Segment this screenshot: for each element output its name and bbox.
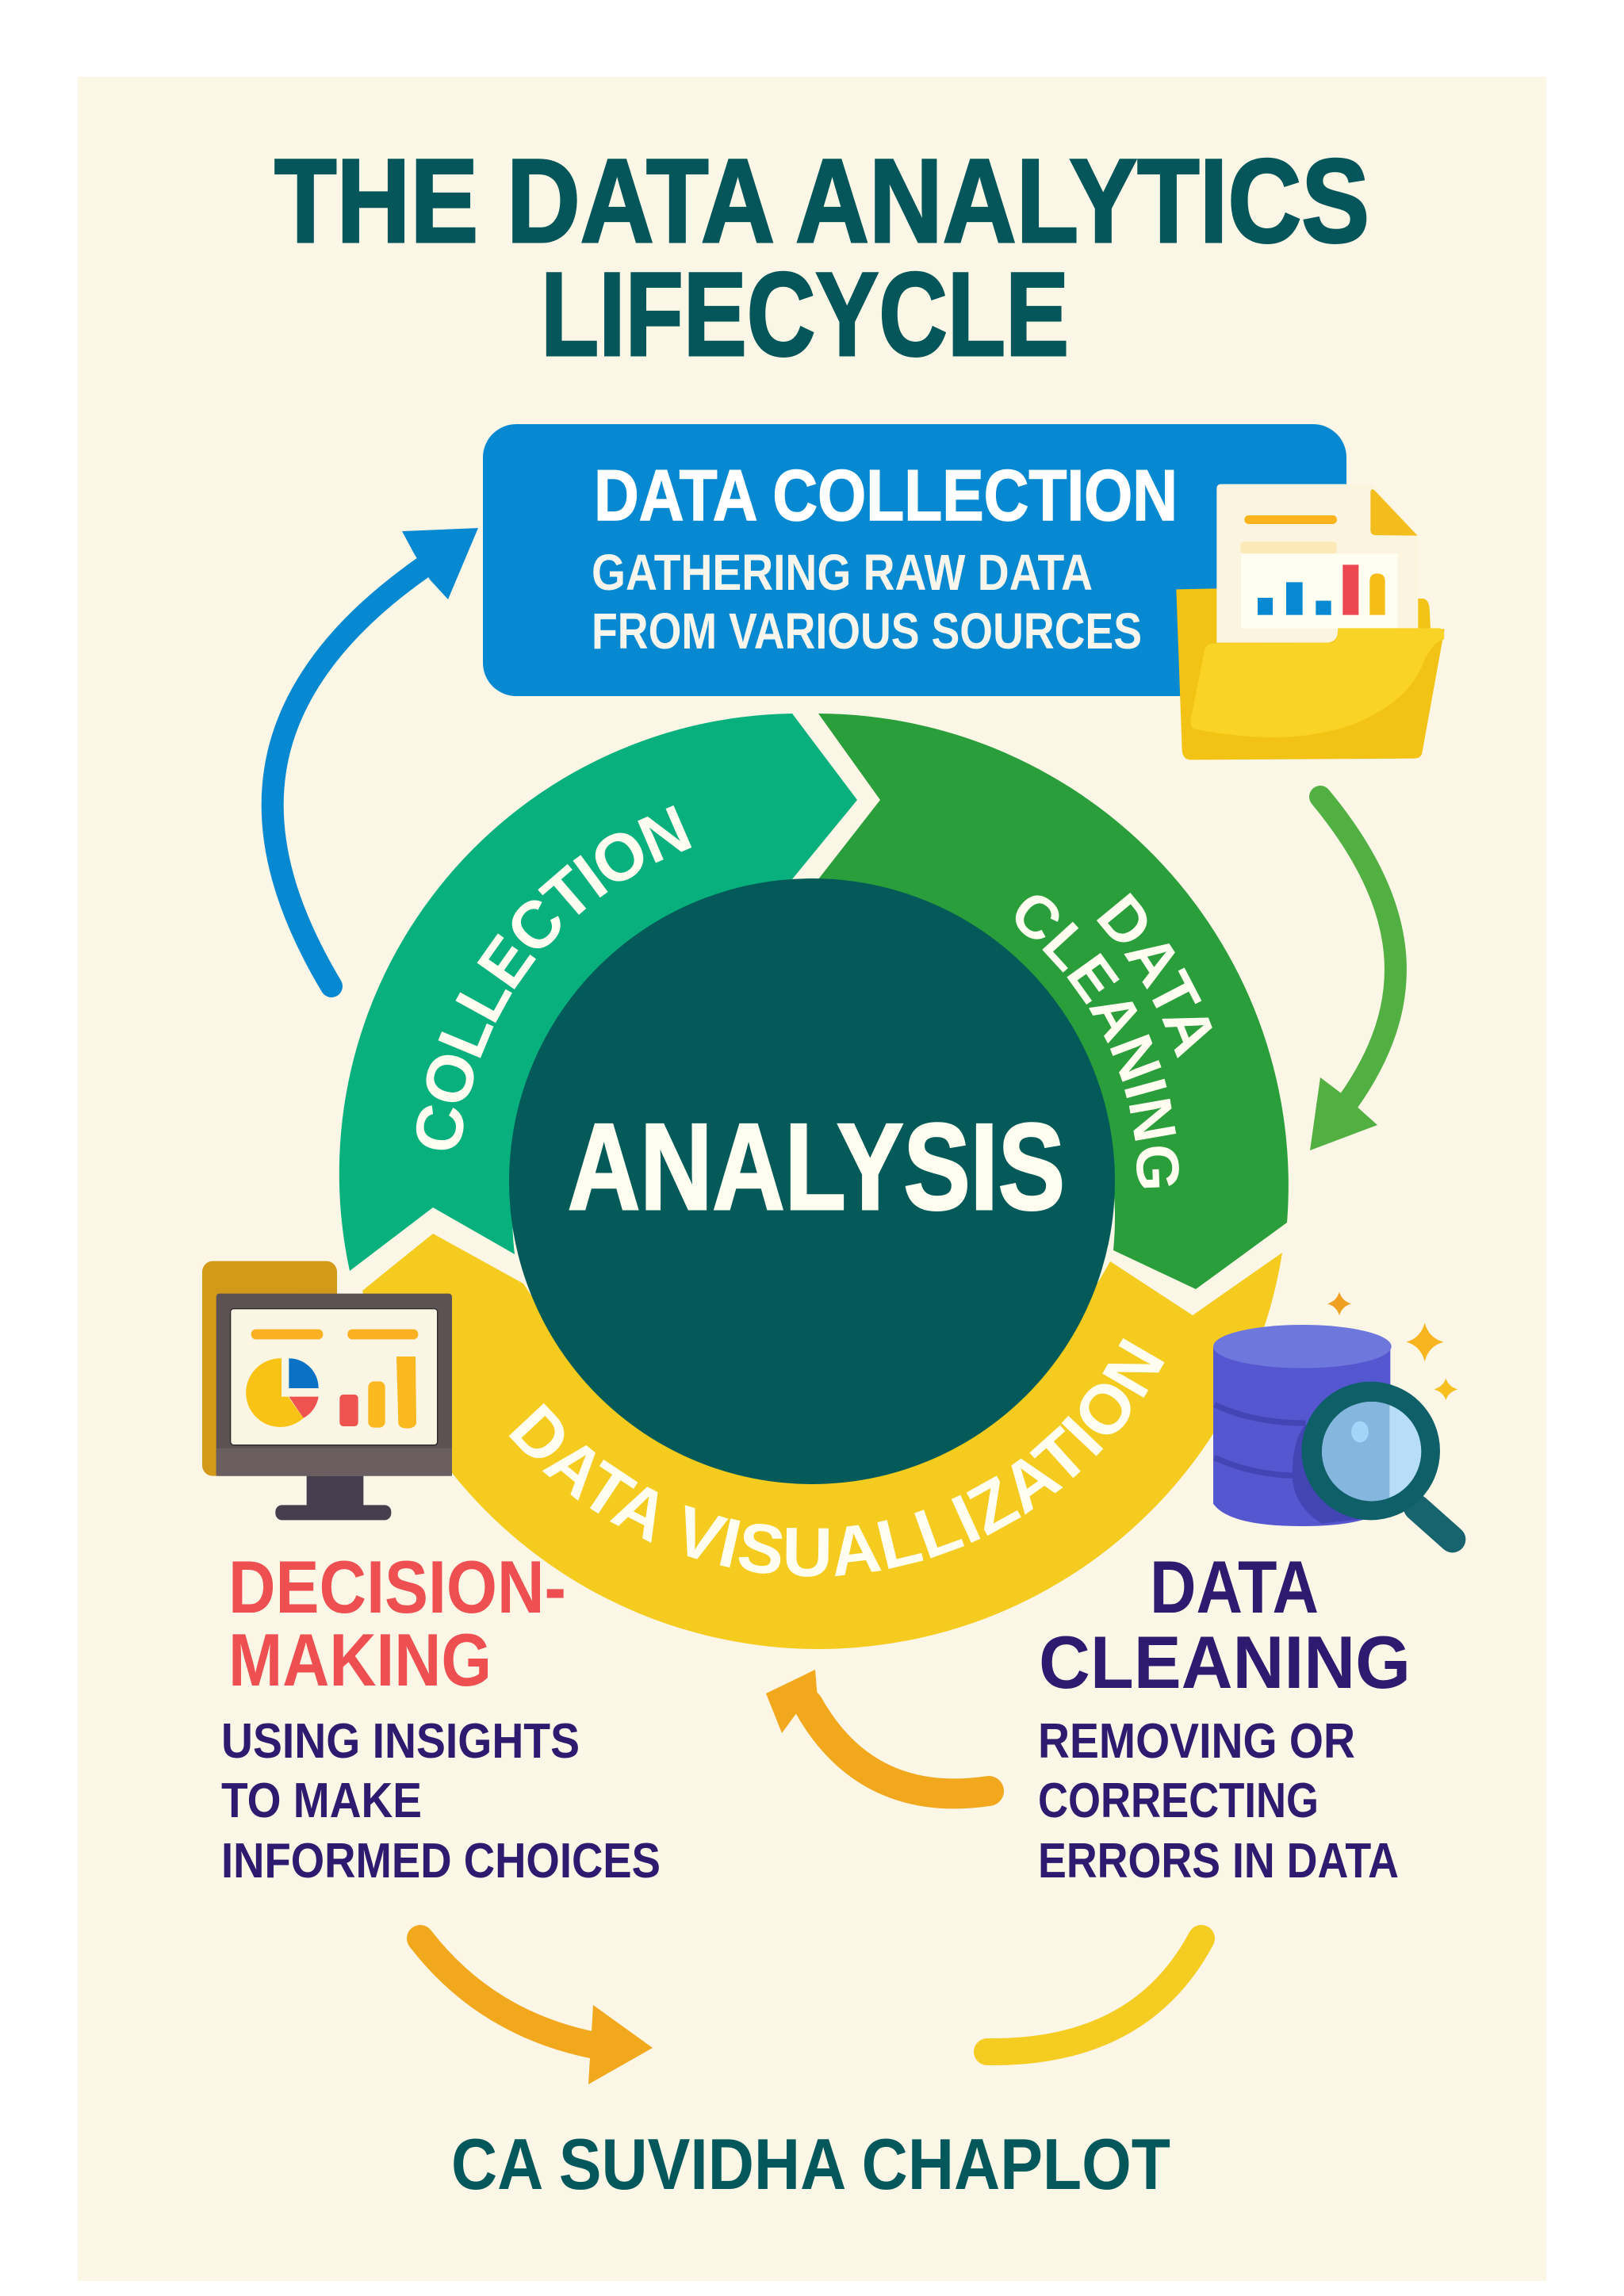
card description: GATHERING RAW DATA: [592, 544, 1093, 601]
card description: [592, 544, 1142, 660]
description: decision-making: TO MAKE: [221, 1774, 422, 1828]
panel: data collection card: [483, 424, 1346, 696]
heading: decision-making: [228, 1545, 566, 1701]
description: decision-making: [221, 1714, 661, 1888]
description: data cleaning: ERRORS IN DATA: [1038, 1834, 1399, 1888]
heading: decision-making: MAKING: [228, 1618, 492, 1701]
sparkles: [1327, 1292, 1457, 1400]
arrow: orange bottom left: [420, 1938, 653, 2084]
heading: decision-making: DECISION-: [228, 1545, 566, 1628]
arrow: orange small: [766, 1670, 989, 1793]
description: data cleaning: REMOVING OR: [1038, 1714, 1355, 1769]
centre circle: analysis: ANALYSIS: [568, 1098, 1065, 1235]
card heading: DATA COLLECTION: [594, 456, 1178, 536]
magnifier: [1301, 1382, 1453, 1540]
description: data cleaning: [1038, 1714, 1399, 1888]
icon: database with magnifier: [1213, 1292, 1457, 1540]
heading: data cleaning: DATA: [1150, 1545, 1319, 1628]
title: LIFECYCLE: [541, 247, 1069, 381]
ring segment: data visualization: DATA VISUALLIZATION: [509, 1338, 1164, 1577]
icon: monitor with dashboard: [202, 1261, 452, 1520]
arrow: blue: [273, 528, 478, 986]
ring segment: data visualization: [362, 1234, 1282, 1649]
ring segment: data cleaning: [818, 714, 1289, 1289]
ring segment: collection: COLLECTION: [416, 806, 691, 1150]
card background: [483, 424, 1346, 696]
ring segment: data cleaning: CLEANING: [1015, 895, 1179, 1188]
title: [274, 134, 1369, 381]
ring segment: collection: [339, 714, 857, 1271]
description: decision-making: INFORMED CHOICES: [221, 1834, 661, 1888]
text block: data cleaning: [1038, 1545, 1411, 1888]
database cylinder: [1213, 1325, 1392, 1526]
heading: data cleaning: [1039, 1545, 1411, 1704]
arrow: green: [1310, 797, 1396, 1150]
heading: data cleaning: CLEANING: [1039, 1621, 1411, 1704]
title: THE DATA ANALYTICS: [274, 134, 1369, 267]
ring segment: data cleaning: DATA: [1097, 893, 1212, 1058]
card description: FROM VARIOUS SOURCES: [592, 603, 1142, 660]
text block: decision-making: [221, 1545, 661, 1888]
chart: lifecycle ring: [339, 714, 1289, 1649]
description: decision-making: USING INSIGHTS: [221, 1714, 580, 1769]
description: data cleaning: CORRECTING: [1038, 1774, 1319, 1828]
icon: folder with document and chart: [1176, 484, 1445, 760]
author credit: CA SUVIDHA CHAPLOT: [451, 2125, 1170, 2205]
arrow: yellow bottom right: [987, 1938, 1201, 2052]
centre circle: analysis: [509, 878, 1115, 1484]
